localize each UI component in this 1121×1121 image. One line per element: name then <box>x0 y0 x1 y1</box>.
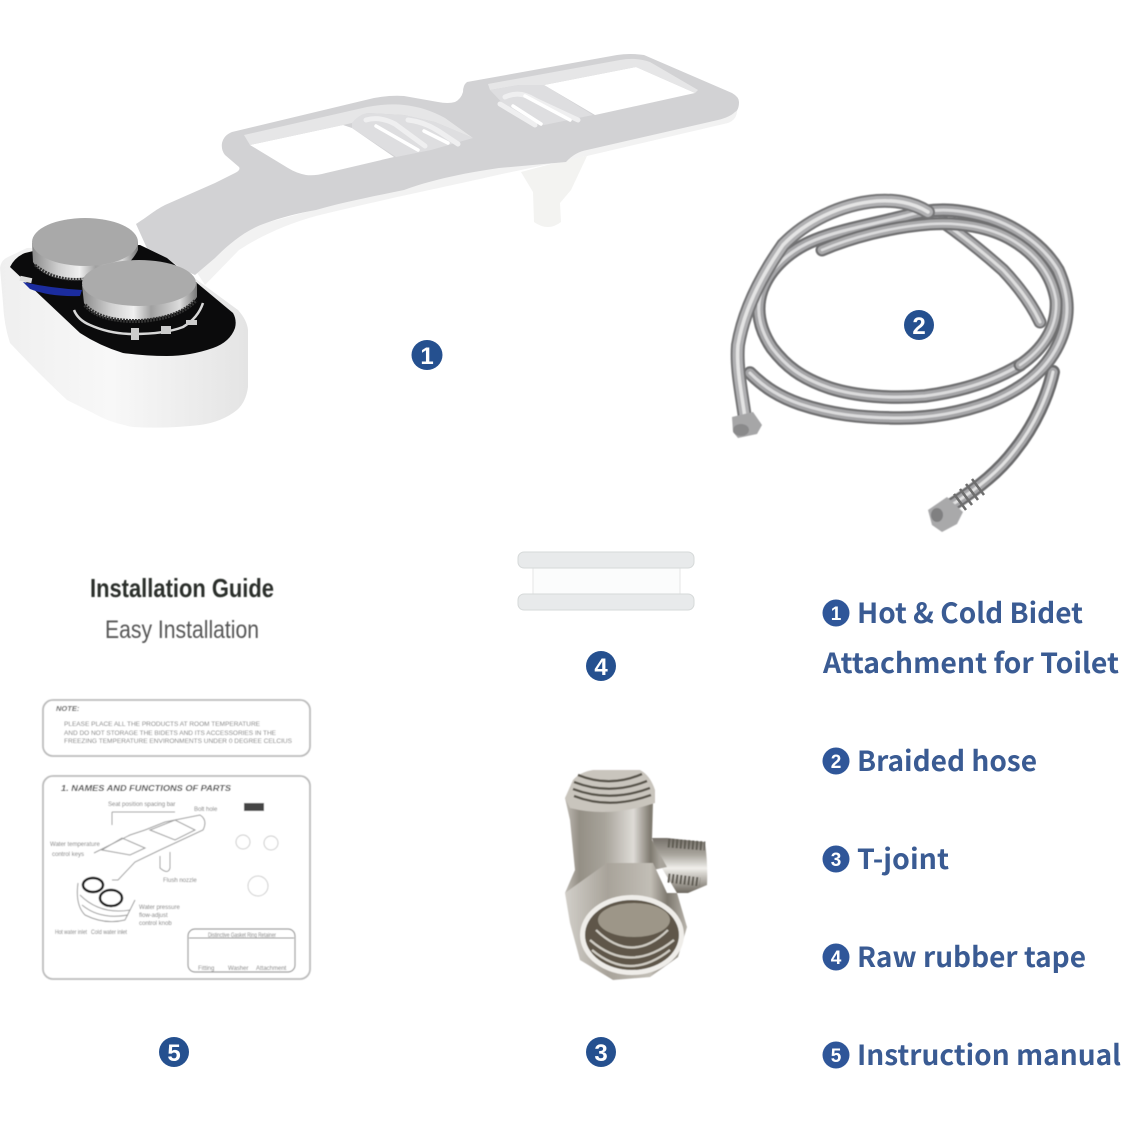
legend item 1: 1 <box>831 604 842 625</box>
plate underside <box>190 95 739 285</box>
left ear slots <box>366 119 458 150</box>
parts box: Distinctive Gasket Ring Retainer <box>208 933 276 939</box>
parts box: Hot water inlet <box>55 930 87 936</box>
legend item 3: 3 <box>831 850 841 871</box>
legend item 4: Raw rubber tape <box>857 936 1086 976</box>
parts box: control keys <box>52 852 84 858</box>
guide subtitle: Easy Installation <box>105 616 259 644</box>
parts box: 1. NAMES AND FUNCTIONS OF PARTS <box>61 784 232 793</box>
fitting left <box>732 412 762 438</box>
badge 3: 3 <box>594 1040 608 1067</box>
note box: NOTE: <box>56 704 80 713</box>
parts box: control knob <box>139 921 172 927</box>
nozzle <box>521 156 587 227</box>
top flange <box>518 552 694 568</box>
base body <box>0 245 248 428</box>
product: braided hose <box>732 201 1067 532</box>
left grooved ear <box>352 113 473 157</box>
badge 3 <box>586 1037 616 1067</box>
legend item 5: 5 <box>831 1046 842 1067</box>
badge 4 <box>586 651 616 681</box>
note box: AND DO NOT STORAGE THE BIDETS AND ITS ACCESSORIES IN THE <box>64 731 276 737</box>
parts box: Water pressure <box>139 905 180 911</box>
badge 5: 5 <box>167 1040 181 1067</box>
legend item 2: Braided hose <box>857 740 1037 780</box>
dial arc <box>74 303 203 334</box>
right grooved ear <box>490 85 593 125</box>
parts box: Bolt hole <box>194 807 218 813</box>
small legend tag <box>244 803 264 811</box>
parts diagram <box>77 812 205 922</box>
product: raw rubber tape <box>518 552 694 610</box>
blue dial ring <box>23 282 82 296</box>
badge 2 <box>904 310 934 340</box>
product: T-joint <box>565 770 707 980</box>
bidet plate <box>136 54 739 275</box>
parts box: Seat position spacing bar <box>108 802 175 808</box>
spool core <box>533 566 680 597</box>
parts box: Cold water inlet <box>91 930 127 936</box>
badge 1: 1 <box>420 343 434 370</box>
product: bidet attachment <box>0 54 739 428</box>
parts box: Washer <box>228 966 248 972</box>
legend item 3: T-joint <box>857 838 949 878</box>
parts box: Attachment <box>256 966 287 972</box>
parts box: Flush nozzle <box>163 878 197 884</box>
top thread <box>565 770 655 812</box>
parts box: Fitting <box>198 966 214 972</box>
fitting right <box>928 497 963 532</box>
legend: parts list <box>822 592 1121 1074</box>
nut opening <box>580 895 684 975</box>
legend item 4: 4 <box>831 948 842 969</box>
note box: FREEZING TEMPERATURE ENVIRONMENTS UNDER 0 DEGREE CELCIUS <box>64 739 292 745</box>
badge 2: 2 <box>912 313 926 340</box>
dial ticks <box>131 320 197 340</box>
knob front <box>82 260 197 321</box>
legend item 1 <box>822 592 1119 682</box>
manual: installation guide <box>43 573 310 979</box>
guide title: Installation Guide <box>90 573 274 603</box>
legend item 2: 2 <box>831 752 841 773</box>
table box <box>188 929 295 972</box>
white indicator <box>20 276 32 283</box>
parts box: flow-adjust <box>139 913 168 919</box>
badge 4: 4 <box>594 654 608 681</box>
right ear slots <box>500 94 578 125</box>
hex nut <box>565 863 687 980</box>
small icons <box>236 835 278 896</box>
hose crimp <box>954 479 984 510</box>
hose coils <box>738 201 1067 506</box>
legend item 1: Attachment for Toilet <box>822 642 1119 682</box>
badge 1 <box>412 340 442 370</box>
black control panel <box>10 245 236 356</box>
right window bevel <box>488 59 698 93</box>
note box: PLEASE PLACE ALL THE PRODUCTS AT ROOM TEMPERATURE <box>64 722 260 728</box>
side branch <box>652 838 707 893</box>
badge 5 <box>159 1037 189 1067</box>
note box <box>43 700 310 756</box>
legend item 5: Instruction manual <box>857 1034 1121 1074</box>
parts box <box>43 776 310 979</box>
parts box: Water temperature <box>50 842 100 848</box>
knob rear <box>32 218 138 280</box>
left window bevel <box>244 104 473 145</box>
main body <box>565 798 667 893</box>
bottom flange <box>518 594 694 610</box>
legend item 1: Hot & Cold Bidet <box>857 592 1083 632</box>
